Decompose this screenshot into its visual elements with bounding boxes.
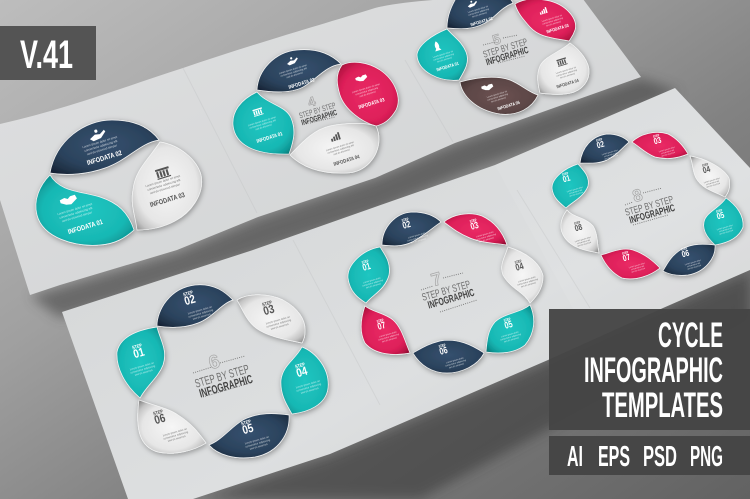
segment: infodata 02: sed do eiusmod tempor — [86, 143, 118, 156]
step 02 — [157, 285, 233, 327]
step 07 — [601, 249, 660, 279]
step 01 — [117, 327, 165, 398]
step 03 — [237, 295, 305, 343]
segment: navy 02: INFODATA 02 — [470, 16, 494, 27]
cycle with 5 segments — [417, 0, 589, 114]
step 06: STEP — [680, 246, 688, 252]
step 06: 06 — [438, 345, 449, 358]
step 02: sed do eiusmod — [604, 155, 618, 161]
step 01: consectetur adipiscing — [362, 279, 384, 288]
step 02: Lorem ipsum dolor — [602, 150, 619, 156]
step 06: Lorem ipsum dolor — [685, 260, 702, 266]
step 03: sed do eiusmod — [270, 322, 289, 331]
step 03: sed do eiusmod — [479, 237, 495, 243]
version badge: V.41 — [20, 33, 73, 77]
segment: brown 05 — [460, 77, 538, 114]
step 05: 05 — [503, 319, 515, 332]
step 07: sed do eiusmod — [382, 337, 398, 343]
step 02: Lorem ipsum dolor — [408, 232, 426, 239]
step 04: sed do eiusmod — [521, 282, 537, 288]
step 05: Lorem ipsum dolor sit — [244, 435, 269, 445]
segment: navy 02: Lorem ipsum dolor sit — [467, 5, 489, 14]
step 08: Lorem ipsum dolor — [575, 237, 592, 243]
step 07: Lorem ipsum dolor — [379, 331, 397, 338]
center title 7: 7 — [429, 268, 444, 290]
step 06 — [663, 244, 715, 275]
step 03 — [632, 132, 688, 158]
step 02: STEP — [595, 137, 603, 143]
segment: white 04 — [538, 43, 589, 94]
step 02: Lorem ipsum dolor sit — [187, 305, 212, 315]
step 07: STEP — [376, 317, 384, 324]
step 03: consectetur elit — [661, 149, 675, 155]
step 06: Lorem ipsum dolor — [446, 357, 464, 364]
step 04: 04 — [514, 261, 526, 274]
segment: red 03: consectetur adipiscing — [542, 16, 564, 26]
center title 6: STEP BY STEP — [193, 362, 251, 391]
step 06 — [138, 400, 206, 453]
step 03: Lorem ipsum dolor — [659, 147, 676, 153]
segment: teal 01: Lorem ipsum dolor sit amet — [248, 116, 276, 127]
step 07: consectetur elit — [631, 265, 645, 271]
background shadow under the top sheet — [30, 78, 680, 318]
segment: red 03: sed do eiusmod — [546, 21, 562, 28]
segment: teal 01: sed do eiusmod — [255, 123, 273, 131]
segment: infodata 03: Lorem ipsum dolor sit amet — [145, 174, 181, 188]
step 02: consectetur elit — [604, 152, 618, 158]
segment: infodata 02 — [50, 120, 159, 174]
step 06: sed do eiusmod — [167, 434, 186, 443]
segment: navy 02 — [447, 0, 513, 29]
center title 6: 6 — [207, 351, 222, 374]
cycle with 4 segments — [233, 50, 398, 173]
cycle with 8 steps — [552, 132, 743, 279]
step 05: 05 — [715, 210, 726, 221]
step 05: STEP — [241, 419, 252, 427]
segment: teal 01: INFODATA 01 — [256, 131, 284, 145]
step 01: sed do eiusmod — [569, 192, 583, 198]
segment: white 04: INFODATA 04 — [333, 154, 361, 168]
segment: navy 02: sed do eiusmod — [472, 12, 488, 19]
segment: teal 01: Lorem ipsum dolor sit — [432, 50, 454, 59]
top paper sheet — [0, 0, 641, 295]
segment: red 03 — [337, 62, 398, 126]
step 04: consectetur adipiscing — [517, 278, 539, 287]
segment: navy 02: consectetur adipiscing — [468, 7, 490, 17]
segment: infodata 01 — [36, 175, 134, 245]
step 06: STEP — [438, 342, 446, 349]
step 08: STEP — [573, 220, 581, 226]
step 07: sed do eiusmod — [631, 268, 645, 274]
step 05: STEP — [715, 208, 723, 214]
step 07: 07 — [376, 320, 387, 333]
step 02: sed do eiusmod — [192, 312, 211, 321]
step 02: consectetur adipiscing — [407, 234, 429, 243]
step 07: Lorem ipsum dolor — [629, 263, 646, 269]
file formats panel: AI — [567, 441, 583, 473]
step 06: sed do eiusmod — [449, 363, 465, 369]
segment: brown 05: INFODATA 05 — [497, 100, 521, 111]
step 03: 03 — [469, 220, 480, 233]
step 05: consectetur adipiscing — [500, 333, 522, 342]
step 03: STEP — [262, 300, 273, 308]
step 04: sed do eiusmod — [300, 386, 319, 395]
segment: infodata 02: Lorem ipsum dolor sit amet — [82, 135, 118, 149]
step 06: 06 — [680, 248, 691, 259]
step 01: consectetur elit — [569, 189, 583, 195]
center title 7 — [420, 268, 477, 312]
step 03: STEP — [652, 133, 660, 139]
step 04: 04 — [295, 364, 309, 380]
segment: infodata 01: consectetur adipiscing elit — [59, 206, 93, 220]
step 04: Lorem ipsum dolor — [518, 276, 536, 283]
step 02 — [580, 134, 629, 163]
step 06: Lorem ipsum dolor sit — [162, 427, 187, 437]
step 01: sed do eiusmod — [134, 368, 153, 377]
step 03: STEP — [469, 217, 477, 224]
step 08: sed do eiusmod — [577, 242, 591, 248]
cycle with 7 steps — [348, 212, 543, 373]
step 01: STEP — [361, 258, 369, 265]
segment: teal 01: consectetur adipiscing elit — [249, 119, 277, 130]
step 07: STEP — [621, 250, 629, 256]
step 08 — [561, 210, 599, 253]
step 06 — [413, 340, 484, 373]
center title 7: STEP BY STEP — [420, 278, 472, 304]
background shadow under the bottom sheet — [200, 272, 750, 499]
step 01: Lorem ipsum dolor — [363, 277, 381, 284]
step 01: STEP — [132, 343, 143, 351]
step 03: sed do eiusmod — [661, 152, 675, 158]
segment: infodata 02: consectetur adipiscing elit — [84, 139, 118, 153]
bottom paper sheet — [62, 88, 750, 499]
step 02 — [382, 212, 441, 246]
file formats panel: PSD — [643, 441, 677, 473]
segment: navy 02: sed do eiusmod — [286, 71, 304, 79]
step 02: sed do eiusmod — [411, 238, 427, 244]
segment: red 03: sed do eiusmod — [359, 90, 377, 98]
segment: navy 02 — [257, 50, 341, 92]
step 06: sed do eiusmod — [687, 265, 701, 271]
step 07 — [361, 306, 410, 354]
step 05: consectetur elit — [719, 227, 733, 233]
segment: infodata 03 — [132, 142, 202, 230]
center title 8 — [624, 185, 676, 226]
step 06: STEP — [153, 409, 164, 417]
segment: navy 02: INFODATA 02 — [288, 77, 316, 91]
segment: teal 01 — [417, 29, 467, 80]
bottom sheet right panel tint — [495, 88, 750, 340]
center title 8: 8 — [630, 185, 645, 206]
step 08: 08 — [573, 222, 584, 233]
step 01: 01 — [361, 261, 373, 274]
segment: white 04: sed do eiusmod — [560, 73, 576, 80]
segment: navy 02: consectetur adipiscing elit — [280, 67, 308, 78]
segment: infodata 01: sed do eiusmod tempor — [61, 210, 93, 223]
step 04: consectetur adipiscing — [296, 382, 322, 393]
step 03: 03 — [652, 135, 663, 146]
center title 5: INFOGRAPHIC — [485, 45, 530, 68]
step 07: consectetur adipiscing — [378, 333, 400, 342]
step 02: STEP — [401, 216, 409, 223]
segment: white 04: Lorem ipsum dolor sit — [555, 66, 577, 75]
center title 7: INFOGRAPHIC — [426, 287, 476, 311]
segment: red 03: INFODATA 03 — [358, 97, 386, 111]
step 05: sed do eiusmod — [249, 442, 268, 451]
step 04: consectetur elit — [706, 180, 720, 186]
step 05: consectetur adipiscing — [245, 438, 271, 449]
step 05: Lorem ipsum dolor — [717, 225, 734, 231]
segment: infodata 03: sed do eiusmod tempor — [149, 182, 181, 195]
segment: infodata 01: Lorem ipsum dolor sit amet — [57, 202, 93, 216]
step 03: 03 — [262, 302, 276, 318]
title panel — [549, 309, 750, 430]
step 04 — [281, 347, 328, 414]
segment: teal 01: consectetur adipiscing — [433, 52, 455, 62]
step 03: consectetur adipiscing — [266, 318, 292, 329]
segment: teal 01: INFODATA 01 — [436, 61, 460, 72]
step 01: 01 — [132, 345, 146, 361]
segment: brown 05: consectetur adipiscing — [487, 92, 509, 102]
center title 5: 5 — [490, 30, 503, 48]
step 01 — [348, 247, 389, 303]
cycle with 3 segments — [36, 120, 202, 245]
segment: white 04: consectetur adipiscing — [556, 68, 578, 78]
step 04: Lorem ipsum dolor sit — [295, 379, 320, 389]
step 02: consectetur adipiscing — [188, 308, 214, 319]
center title 5: STEP BY STEP — [482, 37, 529, 61]
segment: infodata 03: consectetur adipiscing elit — [147, 178, 181, 192]
segment: teal 01: sed do eiusmod — [437, 57, 453, 64]
segment: teal 01 — [233, 92, 294, 154]
step 08: consectetur elit — [577, 239, 591, 245]
step 06: consectetur adipiscing — [163, 430, 189, 441]
step 03 — [444, 214, 507, 245]
file formats panel — [549, 436, 750, 475]
step 05 — [209, 414, 289, 458]
step 01: Lorem ipsum dolor — [567, 187, 584, 193]
segment: infodata 01: INFODATA 01 — [67, 219, 104, 236]
step 04 — [502, 247, 543, 303]
center title 6 — [193, 351, 254, 400]
segment: red 03: INFODATA 03 — [546, 23, 570, 34]
step 05: STEP — [503, 316, 511, 323]
center title 8: STEP BY STEP — [624, 194, 675, 219]
step 01: Lorem ipsum dolor sit — [129, 361, 154, 371]
segment: infodata 02: INFODATA 02 — [86, 150, 123, 167]
step 02: 02 — [401, 219, 412, 232]
segment: navy 02: Lorem ipsum dolor sit amet — [279, 64, 307, 75]
step 01 — [552, 164, 588, 208]
step 04: sed do eiusmod — [706, 183, 720, 189]
step 04: Lorem ipsum dolor — [704, 178, 721, 184]
center title 4: 4 — [306, 93, 318, 110]
step 02: 02 — [595, 139, 606, 150]
segment: white 04: consectetur adipiscing elit — [327, 144, 355, 155]
step 04: 04 — [701, 164, 712, 175]
segment: red 03: Lorem ipsum dolor sit — [541, 14, 563, 23]
center title 8: INFOGRAPHIC — [628, 203, 676, 226]
version badge — [0, 26, 96, 80]
step 05 — [486, 305, 534, 353]
step 04 — [690, 156, 730, 197]
step 04: STEP — [295, 362, 306, 370]
segment: white 04: INFODATA 04 — [556, 78, 580, 89]
segment: white 04 — [290, 123, 379, 173]
step 01: sed do eiusmod — [366, 283, 382, 289]
step 07: 07 — [621, 252, 632, 263]
center title 4: STEP BY STEP — [298, 101, 337, 120]
step 05: Lorem ipsum dolor — [501, 331, 519, 338]
step 01: 01 — [561, 173, 572, 184]
step 01: STEP — [561, 171, 569, 177]
step 04: STEP — [701, 162, 709, 168]
step 05 — [704, 198, 743, 245]
step 03: Lorem ipsum dolor sit — [265, 315, 290, 325]
step 01: consectetur adipiscing — [130, 364, 156, 375]
step 05: sed do eiusmod — [504, 337, 520, 343]
center title 4: INFOGRAPHIC — [300, 108, 338, 127]
step 04: STEP — [514, 258, 522, 265]
file formats panel: EPS — [598, 441, 630, 473]
segment: brown 05: sed do eiusmod — [491, 97, 507, 104]
cycle with 6 steps — [117, 285, 328, 458]
step 05: sed do eiusmod — [719, 230, 733, 236]
segment: white 04: sed do eiusmod — [333, 148, 351, 156]
center title 6: INFOGRAPHIC — [198, 372, 254, 400]
step 06: consectetur elit — [687, 262, 701, 268]
segment: white 04: Lorem ipsum dolor sit amet — [326, 141, 354, 152]
center title 4 — [298, 93, 338, 127]
segment: red 03: Lorem ipsum dolor sit amet — [352, 83, 380, 94]
step 02: STEP — [183, 290, 194, 298]
segment: infodata 03: INFODATA 03 — [149, 192, 186, 209]
step 03: Lorem ipsum dolor — [476, 231, 494, 238]
step 03: consectetur adipiscing — [475, 233, 497, 242]
step 06: 06 — [153, 411, 167, 427]
segment: red 03: consectetur adipiscing — [355, 86, 379, 96]
step 02: 02 — [183, 292, 197, 308]
segment: red 03 — [515, 0, 576, 41]
step 06: consectetur adipiscing — [445, 359, 467, 368]
segment: brown 05: Lorem ipsum dolor sit — [486, 90, 508, 99]
step 05: 05 — [241, 421, 255, 437]
center title 5 — [482, 30, 530, 68]
